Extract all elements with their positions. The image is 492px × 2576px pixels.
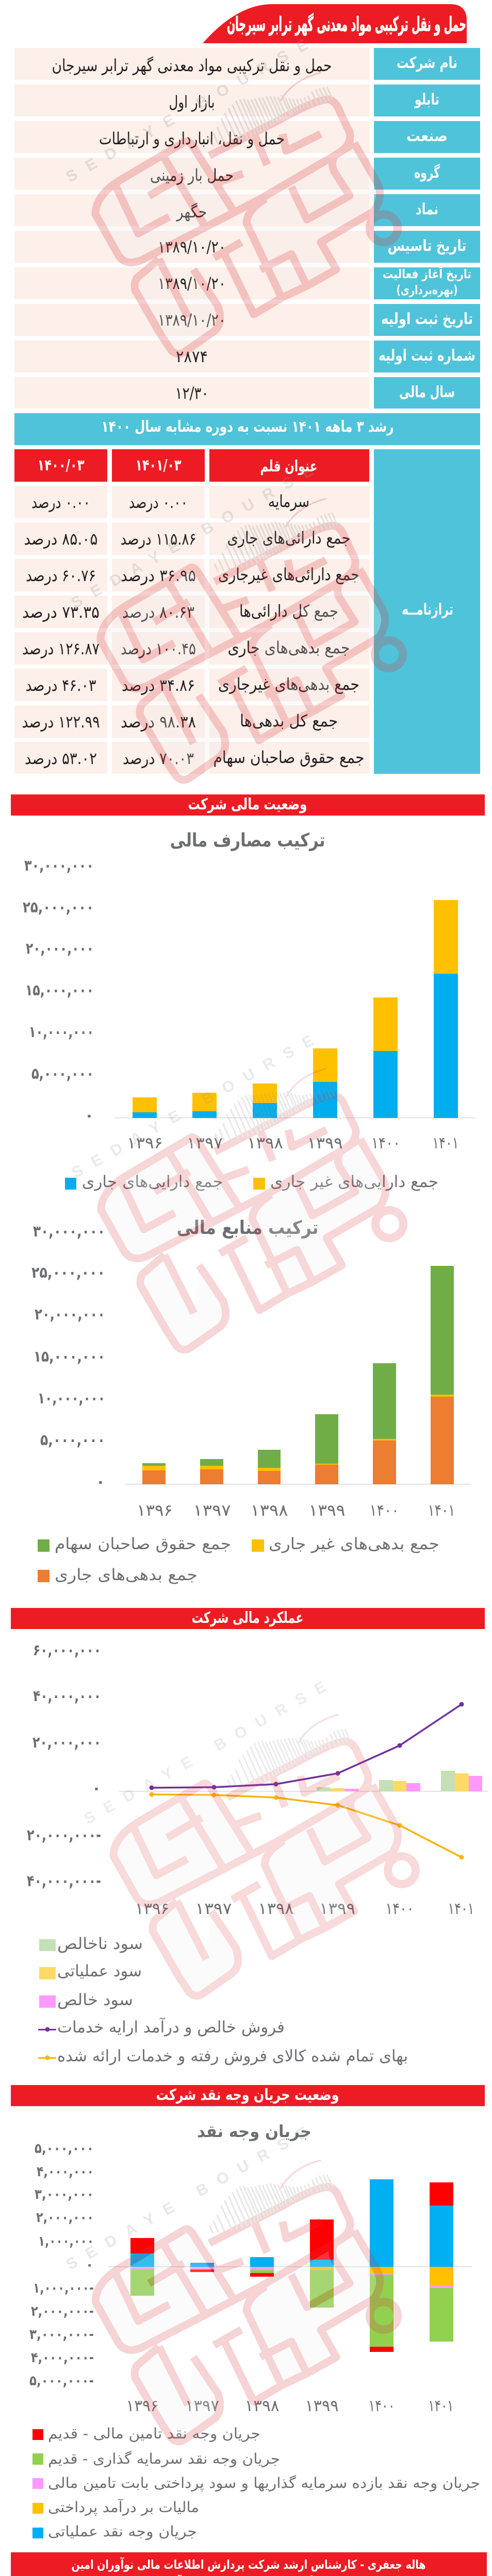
- watermark: top table: [63, 36, 398, 354]
- x axis years: ۱۴۰۱: [448, 1900, 474, 1918]
- y axis labels: ۲,۰۰۰,۰۰۰-: [31, 2303, 94, 2319]
- watermark: growth table: SEDAYE BOURSE: [69, 462, 316, 612]
- x axis years: ۱۳۹۹: [319, 1900, 355, 1918]
- row: industry: [14, 121, 480, 153]
- watermark: performance chart: SEDAYE BOURSE: [81, 1678, 329, 1828]
- legend: سود خالص: [57, 1991, 133, 2009]
- row: shareholders equity: [14, 742, 369, 774]
- y axis labels: [27, 1641, 101, 1890]
- row: non-current assets: ۳۶.۹۵ درصد: [121, 566, 196, 585]
- row: industry: صنعت: [406, 127, 448, 145]
- section heading: cash flow status: وضعیت جریان وجه نقد شرکت: [156, 2086, 339, 2104]
- y axis labels: ۳,۰۰۰,۰۰۰: [35, 2187, 94, 2202]
- row: board: [14, 84, 480, 116]
- x axis years: ۱۴۰۱: [428, 1501, 455, 1520]
- y axis labels: ۴۰,۰۰۰,۰۰۰-: [27, 1872, 101, 1890]
- row: non-current liabilities: [14, 669, 369, 701]
- legend: جمع دارایی‌های جاری: [82, 1173, 223, 1191]
- row: total assets: ۸۰.۶۳ درصد: [122, 602, 194, 622]
- watermark: cash flow chart: SEDAYE BOURSE: [63, 2124, 311, 2274]
- y axis labels: ۵,۰۰۰,۰۰۰: [40, 1431, 105, 1449]
- row: total liabilities: ۱۲۲.۹۹ درصد: [22, 712, 100, 732]
- y axis labels: ۰: [86, 2257, 94, 2273]
- row: activity start date: (بهره‌برداری): [396, 283, 458, 297]
- row: founding date: تاریخ تاسیس: [388, 237, 466, 255]
- line: net sales: [150, 1702, 464, 1790]
- watermark: first charts: SEDAYE BOURSE: [69, 1032, 317, 1182]
- chart: cash flow stacked bars: [29, 2122, 480, 2540]
- row: activity start date: ۱۳۸۹/۱۰/۲۰: [158, 274, 226, 293]
- y axis labels: ۴,۰۰۰,۰۰۰: [37, 2164, 94, 2180]
- row: non-current assets: ۶۰.۷۶ درصد: [26, 566, 96, 585]
- y axis labels: ۲۰,۰۰۰,۰۰۰: [26, 940, 94, 958]
- panel: balance sheet growth table: [14, 449, 480, 774]
- legend: [32, 2425, 480, 2540]
- y axis labels: [29, 2141, 94, 2389]
- row: non-current assets: جمع دارائی‌های غیرجاری: [218, 565, 359, 584]
- legend: بهای تمام شده کالای فروش رفته و خدمات ارائه شده: [57, 2047, 408, 2065]
- y axis labels: ۴,۰۰۰,۰۰۰-: [31, 2350, 94, 2366]
- row: registration number: [14, 341, 480, 372]
- row: current assets: ۱۱۵.۸۶ درصد: [121, 529, 196, 549]
- y axis labels: [31, 1223, 105, 1491]
- row: registration date: تاریخ ثبت اولیه: [381, 310, 473, 328]
- row: board: تابلو: [414, 91, 439, 109]
- section heading: cash flow status: [11, 2085, 485, 2106]
- chart: financial uses stacked bars: [23, 830, 475, 1191]
- x axis years: ۱۴۰۱: [428, 2397, 454, 2415]
- row: current liabilities: ۱۲۶.۸۷ درصد: [22, 639, 100, 658]
- row: shareholders equity: جمع حقوق صاحبان سهام: [214, 748, 364, 767]
- y axis labels: ۲۵,۰۰۰,۰۰۰: [23, 899, 94, 917]
- x axis years: ۱۳۹۹: [305, 2397, 338, 2415]
- bars: [114, 900, 475, 1118]
- x axis years: [127, 1134, 459, 1153]
- y axis labels: [23, 857, 94, 1125]
- bars: [125, 1266, 470, 1485]
- x axis years: ۱۳۹۷: [195, 1900, 232, 1918]
- legend: جمع دارایی‌های غیر جاری: [270, 1173, 438, 1191]
- section heading: financial status: وضعیت مالی شرکت: [188, 795, 307, 814]
- chart title: جریان وجه نقد: [197, 2122, 311, 2141]
- y axis labels: ۳۰,۰۰۰,۰۰۰: [24, 857, 94, 875]
- line: cost of goods sold: [150, 1792, 464, 1860]
- row: non-current liabilities: ۴۶.۰۳ درصد: [26, 675, 96, 695]
- legend: سود عملیاتی: [57, 1962, 142, 1980]
- watermark: first charts: [69, 1032, 403, 1350]
- table header: ۱۴۰۱/۰۳: [135, 456, 182, 474]
- profit bars: [119, 1771, 488, 1792]
- section heading: financial performance: [11, 1608, 485, 1629]
- row: total liabilities: [14, 705, 369, 738]
- legend: [38, 1935, 408, 2065]
- row: activity start date: [14, 266, 480, 299]
- row: total assets: ۷۳.۳۵ درصد: [22, 602, 100, 622]
- x axis years: ۱۳۹۷: [187, 1134, 223, 1153]
- table header: عنوان قلم: [260, 457, 318, 476]
- y axis labels: ۱۵,۰۰۰,۰۰۰: [34, 1348, 105, 1366]
- row: fiscal year: ۱۲/۳۰: [175, 383, 208, 403]
- y axis labels: ۰: [85, 1107, 94, 1125]
- row: group: [14, 158, 480, 190]
- row: group: گروه: [414, 163, 440, 182]
- x axis years: ۱۳۹۶: [135, 1900, 169, 1918]
- row: company name: [14, 48, 480, 80]
- watermark: performance chart: [81, 1678, 416, 1996]
- x axis years: ۱۴۰۱: [432, 1134, 459, 1153]
- section heading: financial status: [11, 794, 485, 816]
- chart: financial sources stacked bars: [31, 1217, 470, 1584]
- x axis years: [137, 1501, 455, 1520]
- row: group: حمل بار زمینی: [150, 165, 234, 185]
- row: founding date: [14, 231, 480, 263]
- y axis labels: ۰: [96, 1473, 105, 1491]
- row: capital: [14, 486, 369, 518]
- row: non-current liabilities: ۳۴.۸۶ درصد: [122, 675, 195, 695]
- table header: ۱۴۰۰/۰۳: [37, 456, 85, 474]
- x axis years: ۱۳۹۶: [137, 1501, 173, 1520]
- row: total liabilities: جمع کل بدهی‌ها: [240, 711, 338, 731]
- y axis labels: ۲۰,۰۰۰,۰۰۰-: [27, 1826, 101, 1844]
- y axis labels: ۳,۰۰۰,۰۰۰-: [29, 2327, 94, 2343]
- table header: [14, 449, 369, 482]
- row: capital: ۰.۰۰ درصد: [31, 493, 90, 512]
- row: founding date: ۱۳۸۹/۱۰/۲۰: [158, 237, 226, 257]
- x axis years: ۱۳۹۸: [247, 1134, 283, 1153]
- legend: جمع بدهی‌های جاری: [55, 1566, 198, 1584]
- bars: [108, 2179, 472, 2352]
- row: capital: سرمایه: [268, 492, 309, 511]
- row: current assets: [14, 522, 369, 555]
- legend: سود ناخالص: [57, 1935, 143, 1953]
- y axis labels: ۲۰,۰۰۰,۰۰۰: [35, 1306, 105, 1324]
- y axis labels: ۱۰,۰۰۰,۰۰۰: [38, 1389, 105, 1408]
- row: non-current liabilities: جمع بدهی‌های غیرجاری: [218, 674, 359, 694]
- x axis years: [126, 2397, 454, 2415]
- row: current liabilities: ۱۰۰.۴۵ درصد: [121, 639, 196, 658]
- row: total assets: جمع کل دارائی‌ها: [239, 601, 338, 621]
- legend: فروش خالص و درآمد ارایه خدمات: [57, 2017, 285, 2037]
- legend: [38, 1535, 439, 1584]
- panel: company information table: [14, 48, 480, 409]
- y axis labels: ۱,۰۰۰,۰۰۰: [38, 2233, 94, 2249]
- x axis years: ۱۳۹۹: [307, 1134, 342, 1153]
- watermark: cash flow chart: [63, 2124, 398, 2442]
- row: fiscal year: سال مالی: [399, 383, 455, 401]
- section heading: financial performance: عملکرد مالی شرکت: [192, 1609, 303, 1627]
- row: symbol: [14, 194, 480, 226]
- y axis labels: ۱۰,۰۰۰,۰۰۰: [29, 1023, 94, 1041]
- row: company name: نام شرکت: [397, 54, 457, 72]
- row: non-current assets: [14, 559, 369, 591]
- x axis years: ۱۳۹۶: [127, 1134, 163, 1153]
- watermark: growth table: [69, 462, 403, 780]
- x axis years: ۱۳۹۷: [185, 2397, 219, 2415]
- row: industry: حمل و نقل، انبارداری و ارتباطات: [99, 129, 285, 148]
- row: company name: حمل و نقل ترکیبی مواد معدنی گهر ترابر سیرجان: [52, 56, 332, 75]
- x axis years: [135, 1900, 474, 1918]
- y axis labels: ۲۰,۰۰۰,۰۰۰: [32, 1734, 101, 1752]
- row: activity start date: تاریخ آغاز فعالیت: [383, 266, 471, 281]
- chart title: ترکیب مصارف مالی: [170, 830, 325, 851]
- title banner: [203, 4, 467, 43]
- x axis years: ۱۴۰۰: [371, 1134, 400, 1153]
- chart: financial performance combo: [27, 1641, 488, 2065]
- footer credits: [11, 2552, 487, 2576]
- row: current liabilities: [14, 632, 369, 665]
- row: registration date: ۱۳۸۹/۱۰/۲۰: [158, 310, 226, 330]
- growth heading: رشد ۳ ماهه ۱۴۰۱ نسبت به دوره مشابه سال ۱۴۰۰: [102, 418, 394, 436]
- side label: balance sheet: [374, 449, 480, 774]
- y axis labels: ۵,۰۰۰,۰۰۰: [35, 2141, 94, 2157]
- legend: جمع حقوق صاحبان سهام: [55, 1535, 231, 1553]
- y axis labels: ۲,۰۰۰,۰۰۰: [36, 2210, 94, 2226]
- y axis labels: ۱,۰۰۰,۰۰۰-: [33, 2280, 94, 2296]
- growth heading: [14, 413, 480, 445]
- row: registration number: ۲۸۷۴: [176, 347, 208, 366]
- x axis years: ۱۳۹۹: [308, 1501, 346, 1520]
- y axis labels: ۴۰,۰۰۰,۰۰۰: [33, 1687, 101, 1705]
- row: fiscal year: [14, 377, 480, 409]
- row: current assets: ۸۵.۰۵ درصد: [24, 529, 98, 549]
- row: total assets: [14, 596, 369, 628]
- row: registration date: [14, 304, 480, 336]
- row: symbol: حگهر: [176, 202, 207, 222]
- legend: جریان وجه نقد تامین مالی - قدیم: [48, 2425, 260, 2442]
- x axis years: ۱۴۰۰: [386, 1900, 414, 1918]
- x axis years: ۱۳۹۶: [126, 2397, 159, 2415]
- row: symbol: نماد: [416, 200, 438, 218]
- x axis years: ۱۳۹۸: [244, 2397, 280, 2415]
- y axis labels: ۰: [92, 1780, 101, 1798]
- legend: جریان وجه نقد بازده سرمایه گذاریها و سود پرداختی بابت تامین مالی: [48, 2475, 480, 2492]
- y axis labels: ۳۰,۰۰۰,۰۰۰: [33, 1223, 105, 1241]
- y axis labels: ۵,۰۰۰,۰۰۰: [31, 1065, 94, 1083]
- chart title: ترکیب منابع مالی: [176, 1217, 319, 1239]
- watermark: top table: SEDAYE BOURSE: [63, 36, 311, 186]
- legend: مالیات بر درآمد پرداختی: [48, 2499, 199, 2516]
- legend: جریان وجه نقد سرمایه گذاری - قدیم: [48, 2450, 280, 2467]
- side label: balance sheet: ترازنامــه: [402, 601, 453, 619]
- row: total liabilities: ۹۸.۳۸ درصد: [121, 712, 196, 732]
- x axis years: ۱۴۰۰: [369, 1501, 399, 1520]
- legend: [65, 1173, 438, 1191]
- x axis years: ۱۳۹۸: [258, 1900, 294, 1918]
- row: current liabilities: جمع بدهی‌های جاری: [228, 638, 350, 657]
- y axis labels: ۲۵,۰۰۰,۰۰۰: [31, 1264, 105, 1282]
- row: shareholders equity: ۵۳.۰۲ درصد: [25, 749, 97, 768]
- row: current assets: جمع دارائی‌های جاری: [227, 528, 351, 548]
- legend: جریان وجه نقد عملیاتی: [48, 2523, 197, 2540]
- row: board: بازار اول: [169, 92, 215, 112]
- row: capital: ۰.۰۰ درصد: [129, 493, 188, 512]
- legend: جمع بدهی‌های غیر جاری: [269, 1535, 439, 1553]
- y axis labels: ۱۵,۰۰۰,۰۰۰: [25, 981, 94, 999]
- x axis years: ۱۳۹۸: [251, 1501, 288, 1520]
- row: shareholders equity: ۷۰.۰۳ درصد: [123, 749, 194, 768]
- y axis labels: ۶۰,۰۰۰,۰۰۰: [33, 1641, 101, 1659]
- x axis years: ۱۴۰۰: [368, 2397, 395, 2415]
- x axis years: ۱۳۹۷: [193, 1501, 231, 1520]
- y axis labels: ۵,۰۰۰,۰۰۰-: [29, 2373, 94, 2389]
